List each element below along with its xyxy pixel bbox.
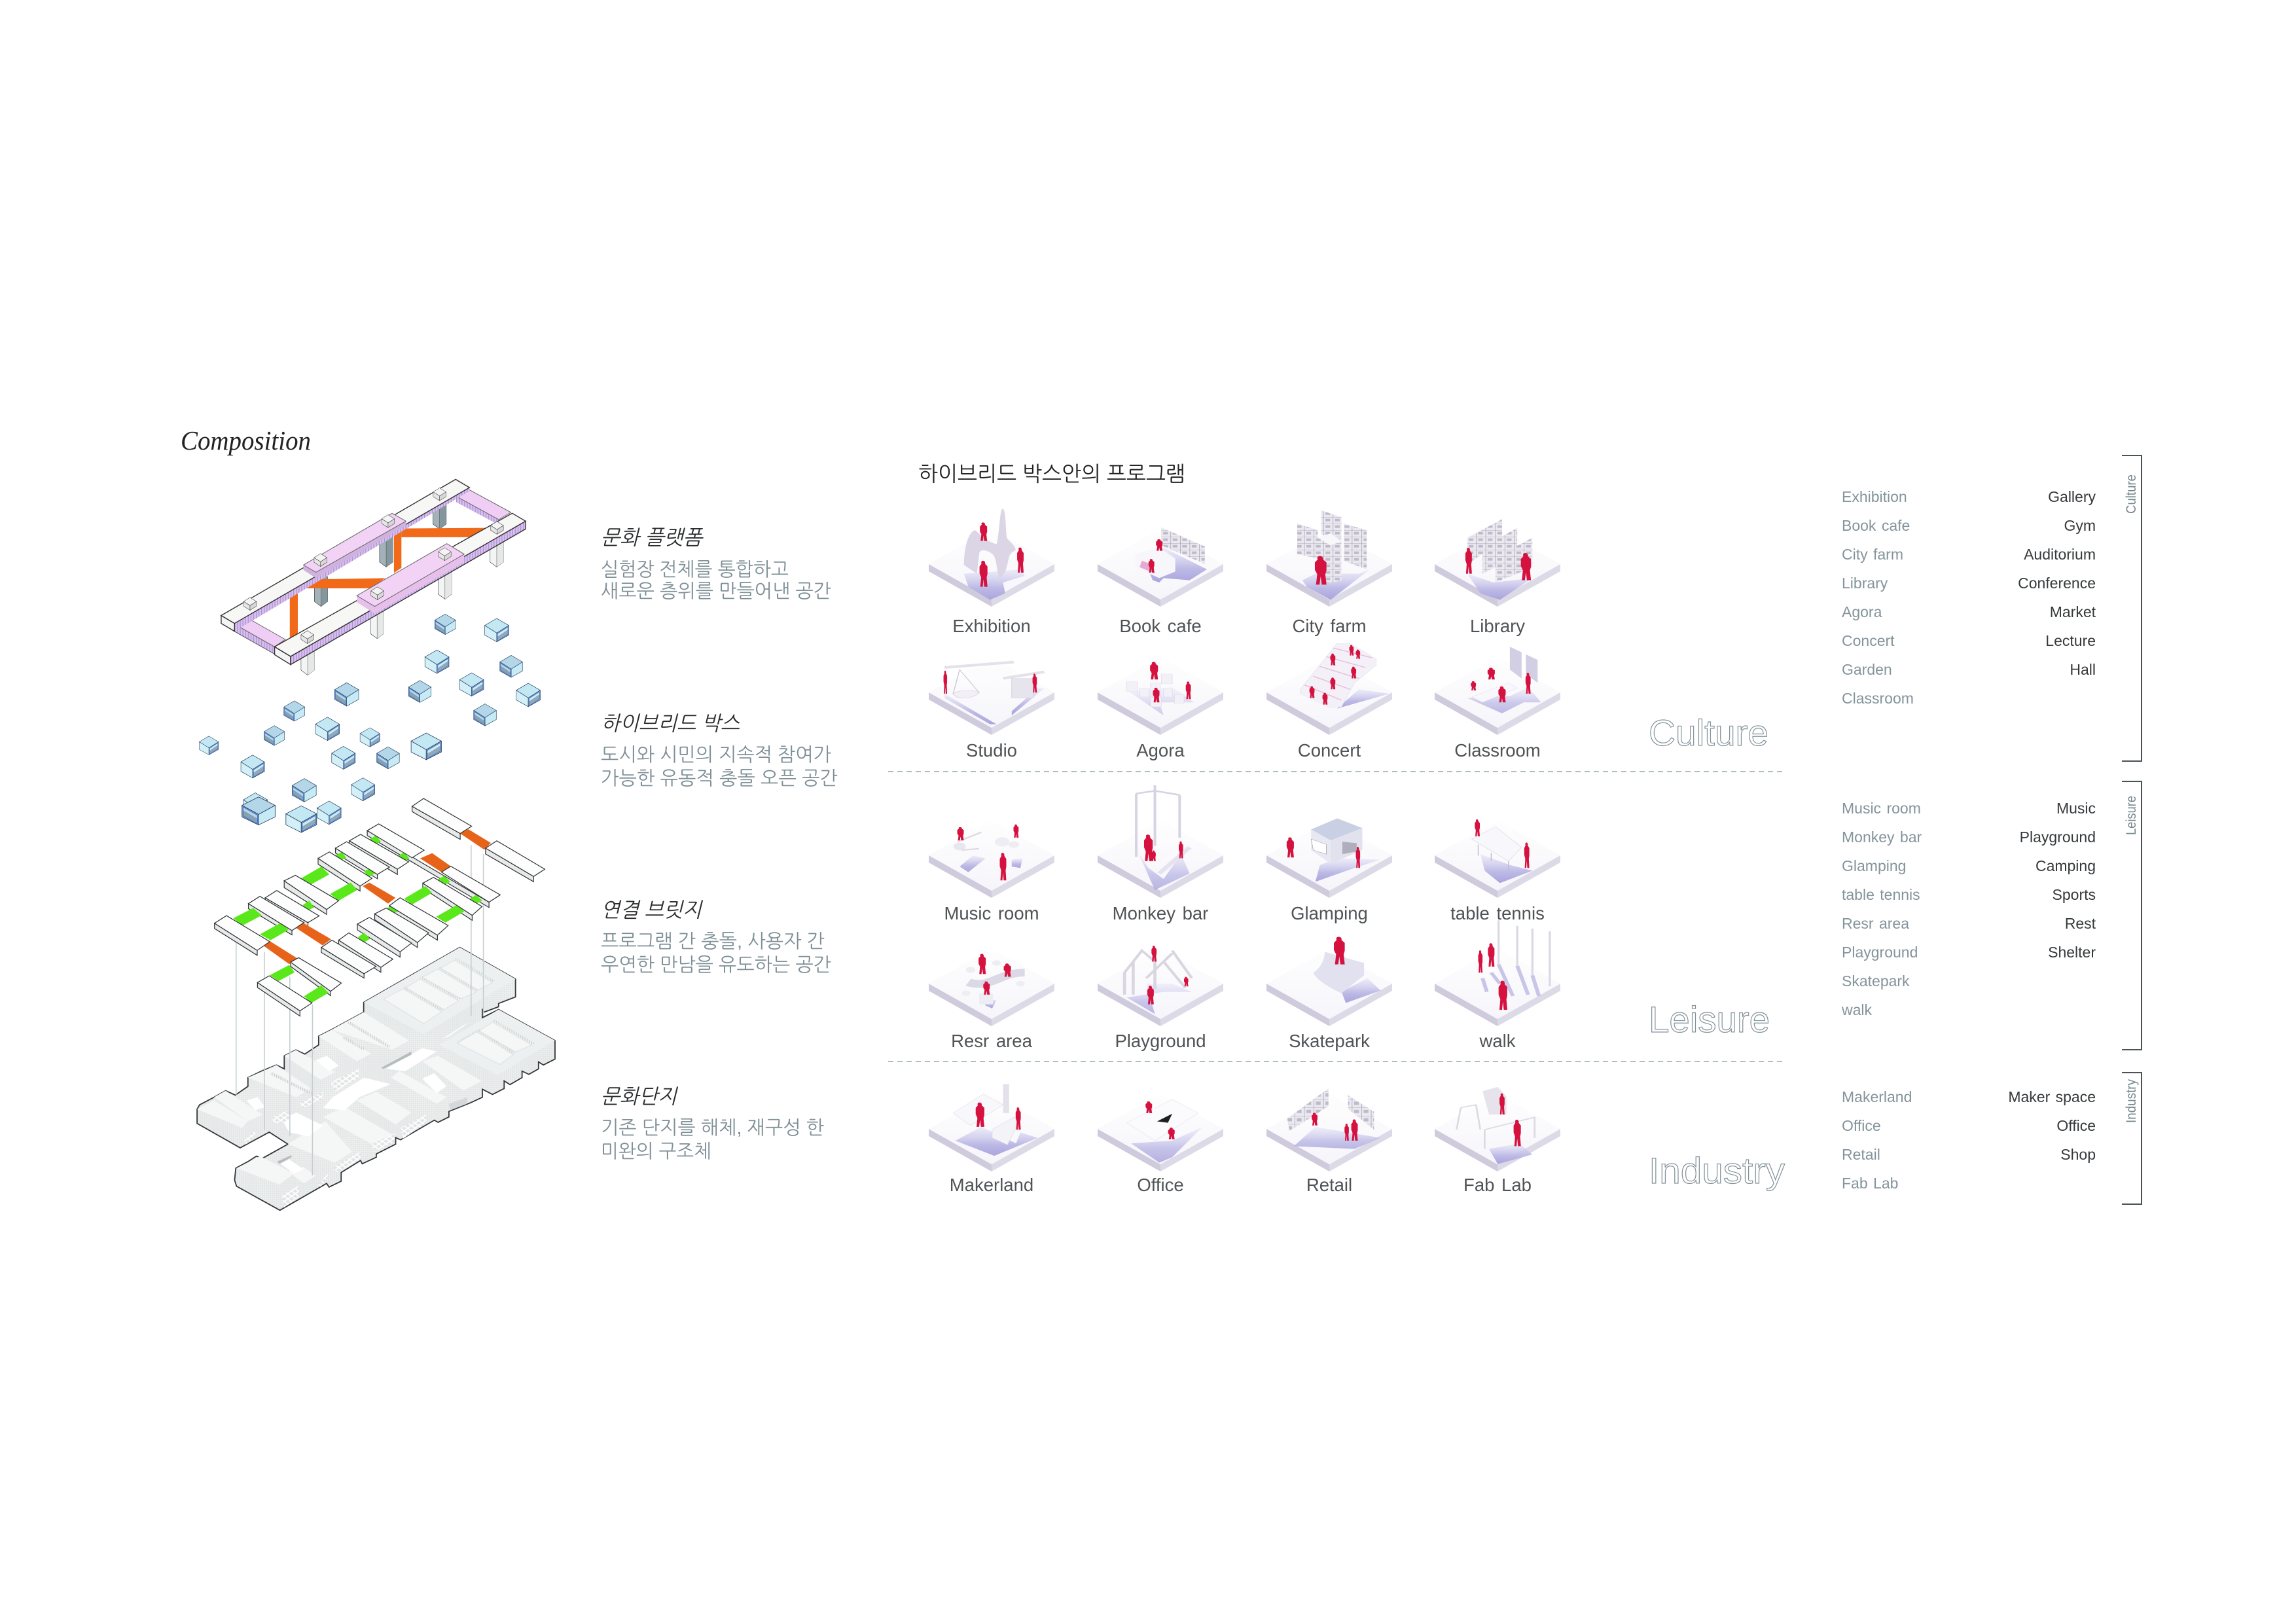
list: Culture programs: City farm	[1842, 546, 1903, 563]
tile: Book cafe: Book cafe	[1119, 616, 1202, 636]
list: Leisure programs: Monkey bar	[1842, 829, 1922, 846]
tile: Office	[1098, 1094, 1223, 1195]
list: Leisure programs: Skatepark	[1842, 972, 1910, 990]
tile: Library: Library	[1470, 616, 1525, 636]
category label: Leisure: Leisure	[1649, 999, 1770, 1040]
tile: Agora	[1098, 657, 1223, 760]
text: connecting bridge: 우연한 만남을 유도하는 공간	[601, 955, 831, 976]
tile: Skatepark: Skatepark	[1289, 1031, 1370, 1051]
dashed dividers	[888, 772, 1786, 1061]
layer: campus base	[197, 948, 555, 1210]
tile: Resr area: Resr area	[951, 1031, 1033, 1051]
bracket: Leisure	[2122, 781, 2142, 1050]
tile: Monkey bar	[1098, 785, 1223, 923]
bracket: Industry	[2122, 1073, 2142, 1204]
list: Industry programs: Office	[1842, 1117, 1881, 1134]
tile: Classroom	[1435, 647, 1560, 760]
list: Leisure programs: Sports	[2053, 886, 2096, 903]
list: Culture programs: Lecture	[2045, 632, 2096, 649]
list: Leisure programs: Camping	[2036, 857, 2096, 874]
layer: cultural platform	[221, 479, 526, 675]
list: Industry programs: Shop	[2060, 1146, 2096, 1163]
list: Leisure programs: Rest	[2065, 915, 2096, 932]
list: Culture programs: Exhibition	[1842, 488, 1907, 505]
tile: Makerland: Makerland	[950, 1175, 1033, 1195]
text: hybrid box	[601, 712, 838, 789]
text: hybrid box: 도시와 시민의 지속적 참여가	[601, 745, 831, 766]
tile: Monkey bar: Monkey bar	[1113, 903, 1208, 923]
text: cultural complex: 미완의 구조체	[601, 1141, 711, 1162]
text: cultural platform: 새로운 층위를 만들어낸 공간	[601, 581, 831, 602]
list: Culture programs: Conference	[2018, 575, 2096, 592]
category label: Industry: Industry	[1649, 1150, 1785, 1191]
list: Leisure programs: Glamping	[1842, 857, 1906, 874]
text: connecting bridge	[601, 899, 831, 976]
open voids	[247, 1023, 469, 1173]
list: Culture programs: Classroom	[1842, 690, 1914, 707]
tile: Resr area	[929, 948, 1054, 1051]
layer: connecting bridges	[215, 798, 545, 1016]
green links	[233, 836, 482, 1003]
list: Culture programs: Concert	[1842, 632, 1895, 649]
tile: Glamping: Glamping	[1291, 903, 1368, 923]
tile: Playground	[1098, 946, 1223, 1051]
title: Composition: Composition	[181, 425, 311, 455]
tile: Fab Lab: Fab Lab	[1463, 1175, 1532, 1195]
orange truss bridges	[290, 528, 488, 639]
exploded axonometric diagram	[197, 479, 555, 1210]
list: Leisure programs: Resr area	[1842, 915, 1909, 932]
text: cultural complex	[601, 1085, 824, 1162]
roofs	[364, 948, 555, 1075]
courtyards	[270, 957, 535, 1095]
tile: Exhibition: Exhibition	[952, 616, 1031, 636]
tile: walk	[1435, 920, 1560, 1051]
list: Culture programs	[1842, 488, 2096, 707]
tile: Studio: Studio	[966, 740, 1017, 760]
list: Culture programs: Agora	[1842, 603, 1882, 620]
list: Culture programs: Gym	[2064, 517, 2096, 534]
list: Culture programs: Garden	[1842, 661, 1892, 678]
tile: Music room: Music room	[944, 903, 1039, 923]
orange links	[262, 829, 491, 964]
list: Culture programs: Library	[1842, 575, 1888, 592]
tile: City farm	[1266, 510, 1392, 636]
tile: Retail	[1266, 1088, 1392, 1195]
lattice facades	[244, 1069, 426, 1207]
bracket: Culture	[2122, 455, 2142, 761]
text: cultural platform: 실험장 전체를 통합하고	[601, 560, 789, 580]
list: Leisure programs: Shelter	[2048, 944, 2096, 961]
text: cultural platform: 문화 플랫폼	[601, 526, 704, 549]
category label: Culture: Culture	[1649, 712, 1768, 753]
tile: Book cafe	[1098, 527, 1223, 636]
text: connecting bridge: 프로그램 간 충돌, 사용자 간	[601, 931, 825, 952]
drop lines	[236, 846, 484, 1175]
list: Culture programs: Market	[2050, 603, 2096, 620]
heading: programs: 하이브리드 박스안의 프로그램	[918, 462, 1185, 486]
text: hybrid box: 가능한 유동적 충돌 오픈 공간	[601, 768, 838, 789]
tile: table tennis	[1435, 819, 1560, 923]
tile: Retail: Retail	[1306, 1175, 1352, 1195]
tile: Agora: Agora	[1136, 740, 1185, 760]
list: Culture programs: Book cafe	[1842, 517, 1910, 534]
tile: Music room	[929, 820, 1054, 923]
side label: Leisure: Leisure	[2124, 796, 2139, 835]
list: Industry programs: Fab Lab	[1842, 1175, 1898, 1192]
list: Leisure programs: Playground	[1842, 944, 1918, 961]
tile: Office: Office	[1137, 1175, 1184, 1195]
white bars	[215, 798, 545, 1011]
tile: Classroom: Classroom	[1454, 740, 1541, 760]
tile: City farm: City farm	[1292, 616, 1367, 636]
side label: Industry: Industry	[2124, 1079, 2139, 1123]
tile: Skatepark	[1266, 936, 1392, 1051]
list: Leisure programs: Music room	[1842, 800, 1921, 817]
side label: Culture: Culture	[2124, 474, 2139, 514]
layer: hybrid boxes	[199, 614, 540, 832]
tile: Library	[1435, 519, 1560, 636]
tile: Glamping	[1266, 819, 1392, 923]
text: connecting bridge: 연결 브릿지	[601, 899, 704, 921]
text: cultural complex: 기존 단지를 해체, 재구성 한	[601, 1118, 824, 1139]
list: Industry programs: Makerland	[1842, 1088, 1912, 1105]
tile: table tennis: table tennis	[1450, 903, 1545, 923]
tile: walk: walk	[1479, 1031, 1516, 1051]
tile: Exhibition	[929, 508, 1054, 636]
list: Leisure programs: Music	[2056, 800, 2096, 817]
list: Leisure programs: walk	[1841, 1001, 1873, 1018]
list: Industry programs: Maker space	[2008, 1088, 2096, 1105]
tile: Playground: Playground	[1115, 1031, 1206, 1051]
text: cultural complex: 문화단지	[601, 1085, 679, 1108]
tile: Concert	[1266, 643, 1392, 760]
list: Industry programs	[1842, 1088, 2096, 1192]
tile: Makerland	[929, 1084, 1054, 1195]
list: Leisure programs: table tennis	[1842, 886, 1920, 903]
list: Leisure programs: Playground	[2020, 829, 2096, 846]
list: Culture programs: Auditorium	[2024, 546, 2096, 563]
tile: Studio	[929, 657, 1054, 760]
list: Industry programs: Office	[2056, 1117, 2096, 1134]
tile: Fab Lab	[1435, 1087, 1560, 1195]
list: Leisure programs	[1841, 800, 2096, 1018]
list: Culture programs: Hall	[2070, 661, 2096, 678]
list: Culture programs: Gallery	[2048, 488, 2096, 505]
text: cultural platform	[601, 526, 831, 602]
tile: Concert: Concert	[1298, 740, 1361, 760]
text: hybrid box: 하이브리드 박스	[601, 712, 740, 735]
list: Industry programs: Retail	[1842, 1146, 1880, 1163]
